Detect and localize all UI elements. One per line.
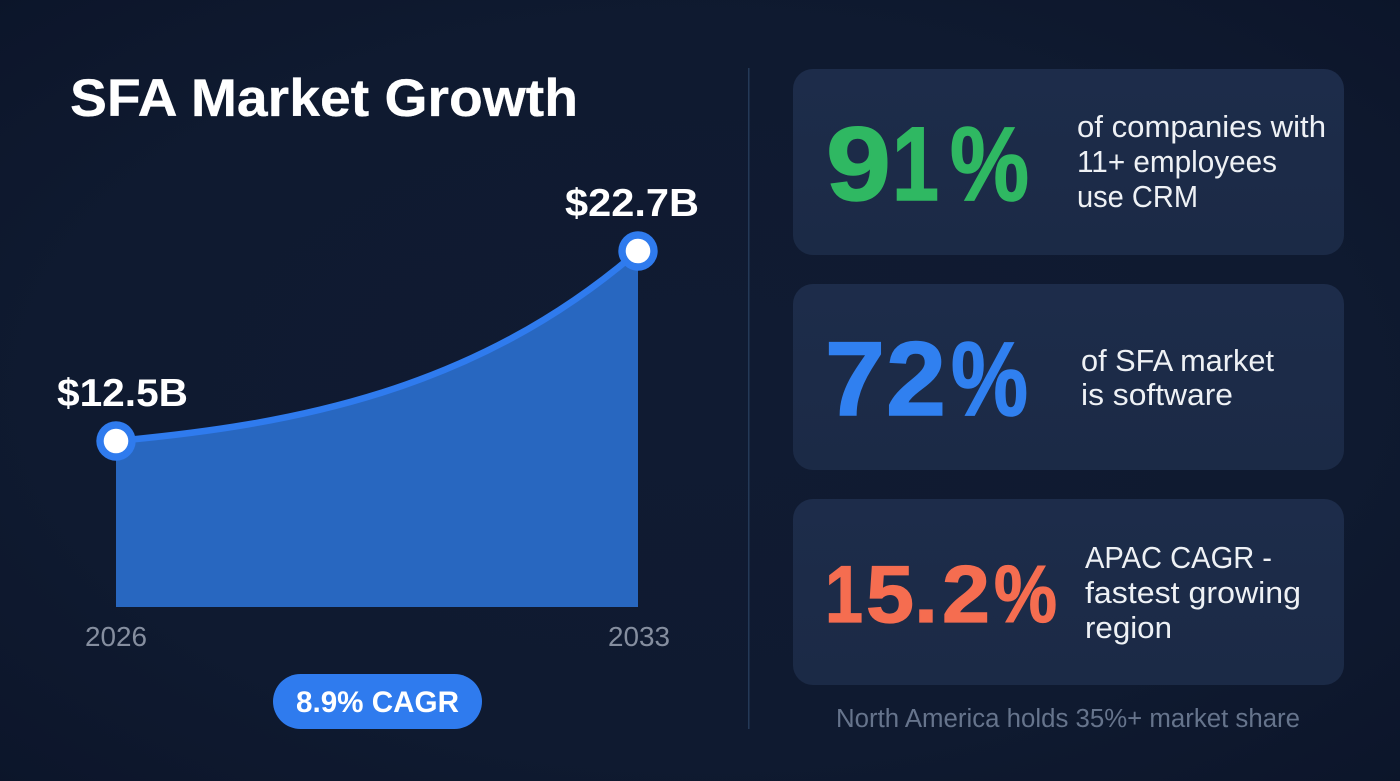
badge: CAGR: 8.9% CAGR: [296, 686, 459, 719]
data point: 2033: [618, 231, 658, 271]
stat description: of companies with: [1077, 110, 1326, 144]
title: SFA Market Growth: [70, 69, 578, 128]
stat value: 15.2%: %: [994, 550, 1057, 640]
panel: 72% stat: [793, 284, 1344, 470]
stat value: 91%: 9: [826, 106, 891, 223]
badge: CAGR: [273, 674, 482, 729]
stat description: of SFA market: [1081, 344, 1275, 378]
stat description: 11+ employees: [1077, 145, 1277, 179]
stat value: 15.2%: .: [914, 550, 938, 640]
stat description: use CRM: [1077, 180, 1198, 214]
stat value: 72%: %: [951, 321, 1028, 438]
footnote: North America holds 35%+ market share: [836, 705, 1300, 733]
chart trend line: [116, 251, 638, 441]
stat value: 91%: %: [950, 106, 1029, 223]
stat description: APAC CAGR -: [1085, 541, 1272, 575]
value label: 2026: $12.5B: [57, 372, 188, 415]
chart area fill: [116, 251, 638, 607]
value label: 2033: $22.7B: [565, 182, 699, 225]
stat value: 72%: 2: [886, 321, 946, 438]
axis label: 2033: 2033: [608, 621, 670, 652]
stat value: 15.2%: 1: [825, 550, 863, 640]
panel: 15.2% stat: [793, 499, 1344, 685]
stat description: fastest growing: [1085, 576, 1301, 610]
stat description: is software: [1081, 378, 1233, 412]
stat value: 15.2%: 2: [942, 550, 990, 640]
stat value: 15.2%: 5: [866, 550, 914, 640]
stat value: 91%: 1: [892, 106, 939, 223]
panel: 91% stat: [793, 69, 1344, 255]
axis label: 2026: 2026: [85, 621, 147, 652]
stat description: region: [1085, 611, 1172, 645]
area chart: market growth: [57, 182, 699, 652]
stat value: 72%: 7: [825, 321, 885, 438]
data point: 2026: [96, 421, 136, 461]
